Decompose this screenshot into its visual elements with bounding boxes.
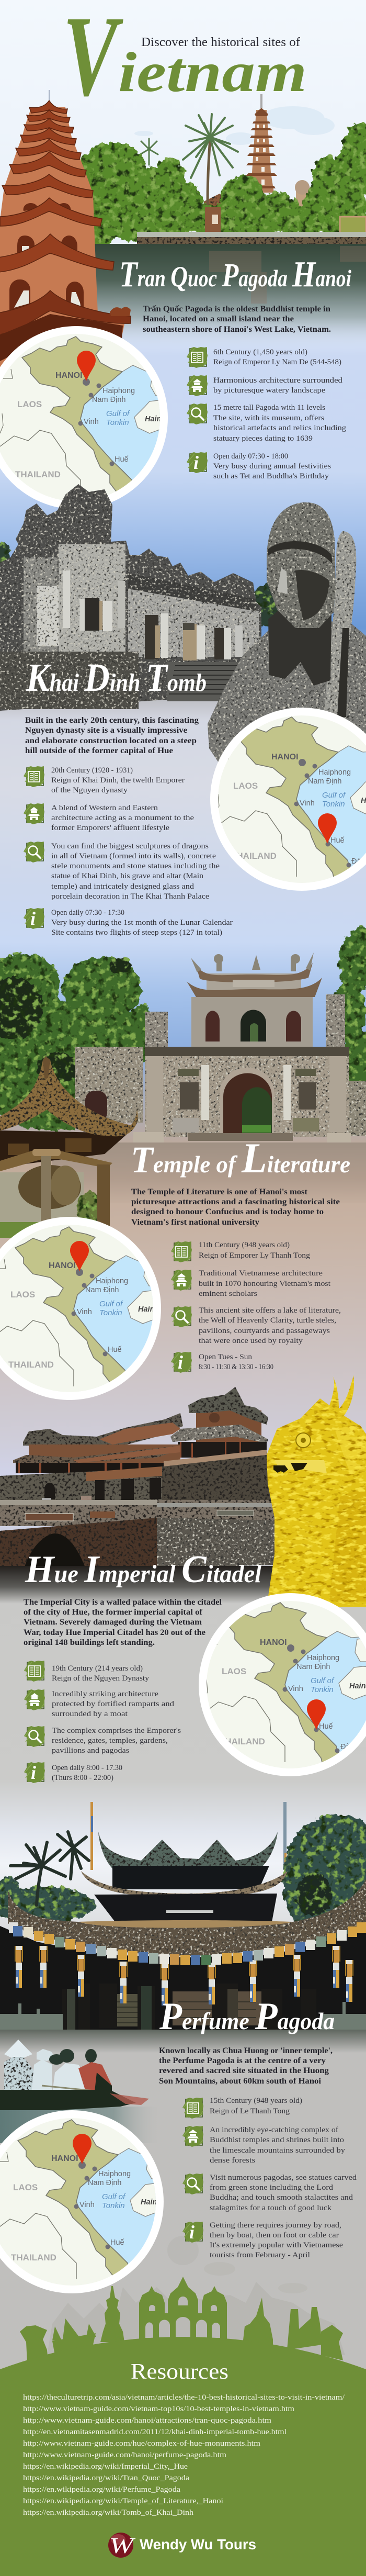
icon: magnifier <box>187 404 208 424</box>
heading: Temple of Literature: Temple of Literature <box>131 1134 350 1182</box>
map: Temple location: Tonkin <box>99 1308 122 1317</box>
sky clouds <box>134 106 335 145</box>
list: resource links: https://en.wikipedia.org/wiki/Tran_Quoc_Pagoda <box>23 2474 189 2482</box>
fact: architecture: Traditional Vietnamese architecture <box>199 1269 323 1278</box>
map: Citadel location: Nam Định <box>296 1663 330 1671</box>
fact: architecture: former Emporers' affluent lifestyle <box>51 824 169 832</box>
tall brick pagoda <box>246 94 277 193</box>
twin towers <box>287 2307 322 2350</box>
long hall roofs <box>13 1413 183 1473</box>
map: Citadel location: THAILAND <box>220 1737 265 1746</box>
fact: features <box>199 1306 341 1345</box>
courtyard ground <box>52 1143 366 1203</box>
fact: opening: Site contains two flights of steep steps (127 in total) <box>51 928 222 937</box>
text: Citadel intro: The Imperial City is a walled palace within the citadel <box>24 1598 222 1607</box>
map: Citadel location: HANOI <box>260 1638 287 1647</box>
church <box>139 2277 227 2342</box>
icon: pagoda <box>24 1689 45 1710</box>
text: Citadel intro <box>24 1598 222 1647</box>
map: Temple location: Haiphong <box>96 1277 128 1285</box>
heading: Hue Imperial Citadel: Hue Imperial Citadel <box>25 1548 262 1591</box>
forest and palms <box>0 1813 366 2025</box>
fact: opening <box>199 1353 273 1371</box>
fact: age: Reign of Emperor Ly Nam De (544-548) <box>213 358 341 366</box>
map: Temple location: Nam Định <box>85 1286 119 1294</box>
icon: book <box>182 2098 203 2119</box>
lake water <box>86 244 366 349</box>
text: Perfume intro: Known locally as Chua Huong or 'inner temple', <box>159 2046 333 2055</box>
fact: features <box>51 842 220 901</box>
stairs <box>167 662 241 701</box>
map: Perfume location: Gulf of <box>102 2192 126 2201</box>
fact: architecture: dense forests <box>210 2156 255 2165</box>
list: resource links <box>23 2393 345 2517</box>
fact: architecture <box>51 804 194 832</box>
temple facade between trees <box>205 207 366 233</box>
fact: architecture: A blend of Western and Eastern <box>51 804 158 812</box>
list: resource links: http://www.vietnam-guide.com/hanoi/attractions/tran-quoc-pagoda.htm <box>23 2416 271 2425</box>
fact: practical <box>210 2221 343 2259</box>
fact: opening: (Thurs 8:00 - 22:00) <box>52 1774 113 1782</box>
panel: Hue Imperial Citadel scene <box>0 1375 366 1607</box>
map: Tran Quoc location <box>0 326 168 508</box>
text: Khai Dinh intro: hill outside of the former capital of Hue <box>25 746 173 755</box>
list: resource links: http://en.vietnamitasenmadrid.com/2011/12/khai-dinh-imperial-tomb-hue.html <box>23 2428 287 2436</box>
trees <box>0 926 366 1130</box>
hanging banners <box>15 1946 353 2006</box>
text: Tran Quoc intro: Trấn Quốc Pagoda is the oldest Buddhist temple in <box>143 305 330 313</box>
logo: Wendy Wu Tours <box>108 2533 256 2558</box>
fact: age: Reign of Khai Dinh, the twelth Emporer <box>51 776 185 785</box>
map: Citadel location: Vinh <box>288 1685 303 1693</box>
skyline silhouette background <box>47 2236 345 2355</box>
tall pagoda <box>100 2286 124 2342</box>
fact: architecture: built in 1070 honouring Vietnam's most <box>199 1280 331 1288</box>
panel: Tran Quoc Pagoda scene <box>0 90 366 377</box>
prayer flags row <box>9 1922 366 1965</box>
bell pavilion <box>0 1056 138 1238</box>
trees behind tomb <box>0 543 281 626</box>
text: Perfume intro: the Perfume Pagoda is at the centre of a very <box>159 2056 326 2065</box>
icon: book <box>187 347 208 368</box>
map: Perfume location: Haiphong <box>98 2170 131 2178</box>
text: Tran Quoc intro: Hanoi, located on a small island near the <box>143 315 294 323</box>
map: Citadel location: LAOS <box>222 1666 246 1676</box>
fact: age <box>199 1241 311 1260</box>
fact: opening: Open daily 07:30 - 17:30 <box>51 909 124 917</box>
icons and facts: Tran Quoc <box>187 347 347 480</box>
fact: architecture: architecture acting as a monument to the <box>51 814 194 822</box>
fact: features: in all of Vietnam (formed into its walls), concrete <box>51 852 216 860</box>
list: resource links: https://en.wikipedia.org/wiki/Perfume_Pagoda <box>23 2485 180 2494</box>
text: Citadel intro: of the city of Hue, the former imperial capital of <box>24 1608 203 1617</box>
junk ship <box>52 2319 96 2355</box>
fact: age: 20th Century (1920 - 1931) <box>51 766 133 775</box>
map: Perfume location: LAOS <box>13 2182 38 2192</box>
map: Khai Dinh location: Gulf of <box>322 791 346 800</box>
map: Tran Quoc location: Gulf of <box>106 409 130 418</box>
fact: opening: Open Tues - Sun <box>199 1353 253 1361</box>
fact: architecture: Harmonious architecture surrounded <box>213 376 343 385</box>
map: Tran Quoc location: Huế <box>115 455 129 464</box>
map: Tran Quoc location: LAOS <box>17 399 42 409</box>
map: Tran Quoc location: Haiphong <box>102 387 135 395</box>
statue <box>208 502 366 764</box>
map: Khai Dinh location: Huế <box>330 836 345 845</box>
right gate <box>321 2325 343 2360</box>
map: Khai Dinh location: Tonkin <box>322 800 345 809</box>
moat water <box>0 1566 277 1604</box>
text: Tran Quoc intro: southeastern shore of Hanoi's West Lake, Vietnam. <box>143 325 331 334</box>
fact: architecture: the limescale mountains surrounded by <box>210 2146 346 2155</box>
icon: pagoda <box>24 803 44 824</box>
icon: info: i <box>189 2222 195 2243</box>
fact: features: Buddha; and touch smooth stalactites and <box>210 2193 353 2202</box>
icon: book <box>24 1661 45 1682</box>
text: Khai Dinh intro: Built in the early 20th century, this fascinating <box>25 716 199 725</box>
map: Khai Dinh location: Haiphong <box>318 768 351 777</box>
map: Citadel location: Gulf of <box>311 1676 335 1685</box>
fact: age: 11th Century (948 years old) <box>199 1241 290 1249</box>
fact: features: historical artefacts and relics including <box>213 424 347 432</box>
map: Tran Quoc location: Vinh <box>84 418 99 426</box>
title: Vietnam: ietnam <box>118 41 307 104</box>
map: Tran Quoc location: THAILAND <box>15 469 61 479</box>
icons and facts: Citadel <box>24 1661 181 1783</box>
text: Citadel intro: original 148 buildings left standing. <box>24 1638 155 1647</box>
text: Temple intro <box>131 1188 340 1227</box>
water bottom left <box>0 2107 162 2143</box>
icon: info <box>182 2222 203 2243</box>
icon: info: i <box>193 452 199 473</box>
fact: features: the Well of Heavenly Clarity, turtle steles, <box>199 1316 336 1325</box>
trees <box>73 123 366 246</box>
fact: features <box>52 1727 181 1755</box>
temple gate upper <box>145 953 345 1049</box>
text: Perfume intro: revered and sacred site situated in the Huong <box>159 2066 329 2075</box>
upper pavilion <box>170 1387 268 1458</box>
heading: Khai Dinh Tomb: Khai Dinh Tomb <box>26 656 207 700</box>
map: Temple location <box>0 1217 161 1400</box>
fact: opening: such as Tet and Buddha's Birthday <box>213 472 329 480</box>
citadel wall <box>0 1450 280 1505</box>
map: Tran Quoc location: HANOI <box>55 371 83 380</box>
icon: book <box>24 766 44 787</box>
map: Khai Dinh location: THAILAND <box>231 851 277 861</box>
logo: Wendy Wu Tours: Wendy Wu Tours <box>140 2536 256 2552</box>
map: Temple location: LAOS <box>10 1290 35 1300</box>
fact: features: residence, gates, temples, gardens, <box>52 1737 168 1745</box>
palm trees <box>140 114 238 231</box>
fact: features <box>210 2174 357 2212</box>
fact: features <box>213 404 347 443</box>
fact: architecture: An incredibly eye-catching complex of <box>210 2126 338 2134</box>
pagoda upper tiers <box>81 1832 288 1922</box>
map: Perfume location: THAILAND <box>11 2253 56 2263</box>
prayer flag poles <box>90 1802 287 1874</box>
fact: features: that were once used by royalty <box>199 1337 303 1345</box>
text: Temple intro: picturesque attractions and a fascinating historical site <box>131 1197 340 1206</box>
text: Tran Quoc intro <box>143 305 331 334</box>
map: Perfume location: Hainan <box>141 2198 166 2207</box>
red pagoda foreground <box>0 90 131 377</box>
fact: features: stalagmites for a touch of good luck <box>210 2204 332 2212</box>
pagoda floor <box>0 2030 366 2053</box>
map: Temple location: THAILAND <box>8 1360 54 1370</box>
map: Citadel location: Tonkin <box>311 1685 334 1694</box>
fact: age <box>213 348 341 366</box>
fact: features: from green stone including the Lord <box>210 2183 334 2192</box>
map: Citadel location: Haiphong <box>307 1654 339 1662</box>
fact: practical: tourists from February - April <box>210 2251 310 2259</box>
map: Perfume location: Nam Định <box>88 2179 121 2187</box>
icon: pagoda <box>187 375 208 396</box>
fact: opening: Very busy during the 1st month of the Lunar Calendar <box>51 919 233 927</box>
text: Khai Dinh intro: and elaborate construction located on a steep <box>25 736 197 745</box>
fact: age: of the Nguyen dynasty <box>51 786 128 794</box>
map: Temple location: Huế <box>108 1346 122 1354</box>
list: resource links: http://www.vietnam-guide.com/hue/complex-of-hue-monuments.htm <box>23 2439 260 2448</box>
tomb facade <box>0 544 259 709</box>
fact: features: porcelain decoration in The Khai Thanh Palace <box>51 892 209 901</box>
list: resource links: https://en.wikipedia.org/wiki/Imperial_City,_Hue <box>23 2462 188 2471</box>
text: Temple intro: designed to honour Confucius and is today home to <box>131 1207 324 1216</box>
map: Citadel location <box>199 1593 366 1788</box>
fact: features: 15 metre tall Pagoda with 11 levels <box>213 404 325 412</box>
illustration: Vietnam landmarks skyline <box>0 2277 366 2576</box>
fact: age: Reign of the Nguyen Dynasty <box>52 1674 150 1683</box>
heading: Resources: Resources <box>131 2360 228 2384</box>
fact: features: This ancient site offers a lake of literature, <box>199 1306 341 1315</box>
fact: architecture <box>210 2126 346 2165</box>
fact: age: Reign of Emporer Ly Thanh Tong <box>199 1251 311 1260</box>
fact: practical: Getting there requires journey by road, <box>210 2221 341 2230</box>
map: Citadel location: Huế <box>319 1722 333 1731</box>
stairs and courtyard <box>62 1984 316 2031</box>
fact: architecture: eminent scholars <box>199 1290 257 1298</box>
icon: magnifier <box>24 842 44 863</box>
icon: magnifier <box>171 1306 192 1327</box>
icon: pagoda <box>182 2126 203 2147</box>
panel: Temple of Literature scene <box>0 926 366 1238</box>
fact: features: Visit numerous pagodas, see statues carved <box>210 2174 357 2182</box>
golden dragon <box>267 1375 366 1607</box>
panel: Perfume Pagoda scene <box>0 1802 366 2143</box>
fact: architecture: Incredibly striking architecture <box>52 1690 158 1698</box>
text: Temple intro: The Temple of Literature is one of Hanoi's most <box>131 1188 308 1196</box>
fact: architecture: Buddhist temples and shrines built into <box>210 2136 344 2144</box>
ground <box>0 691 230 721</box>
roof ridge <box>78 1920 293 1928</box>
lake wall <box>137 232 366 244</box>
pagoda interior <box>0 1926 366 2031</box>
stone bridge <box>0 1500 282 1573</box>
text: Perfume intro <box>159 2046 333 2086</box>
main roof <box>8 1879 366 1956</box>
text: Khai Dinh intro <box>25 716 199 755</box>
list: resource links: http://www.vietnam-guide.com/hanoi/perfume-pagoda.htm <box>23 2451 226 2459</box>
hill <box>0 2337 366 2576</box>
fact: age <box>52 1664 150 1683</box>
fact: opening: Very busy during annual festivities <box>213 462 331 471</box>
map: Temple location: HANOI <box>49 1261 76 1270</box>
map: Tran Quoc location: Tonkin <box>106 418 129 427</box>
map: Khai Dinh location: Vinh <box>300 799 315 808</box>
icon: book <box>171 1241 192 1262</box>
fact: opening <box>51 909 233 937</box>
fact: features: pavilions, courtyards and passageways <box>199 1327 330 1335</box>
map: Tran Quoc location: Hainan <box>145 415 170 423</box>
list: resource links: https://theculturetrip.com/asia/vietnam/articles/the-10-best-historical-sites-to-visit-in-vietnam/ <box>23 2393 345 2402</box>
fact: opening: Open daily 07:30 - 18:00 <box>213 452 288 461</box>
map: Temple location: Gulf of <box>99 1300 123 1308</box>
fact: age: 15th Century (948 years old) <box>210 2097 302 2105</box>
icon: pagoda <box>171 1270 192 1291</box>
map: Temple location: Vinh <box>77 1308 92 1316</box>
fact: architecture <box>52 1690 175 1718</box>
map: Temple location: Hainan <box>138 1305 163 1314</box>
fact: age: 19th Century (214 years old) <box>52 1664 143 1673</box>
fact: opening <box>52 1764 122 1782</box>
lake reflections <box>209 246 366 304</box>
icon: magnifier <box>182 2174 203 2194</box>
title: Discover the historical sites of: Discover the historical sites of <box>141 36 300 49</box>
fact: practical: then by boat, then on foot or cable car <box>210 2231 339 2239</box>
heading: Perfume Pagoda: Perfume Pagoda <box>159 1995 335 2038</box>
list: resource links: https://en.wikipedia.org/wiki/Tomb_of_Khai_Dinh <box>23 2508 194 2517</box>
text: Khai Dinh intro: Nguyen dynasty site is a visually impressive <box>25 726 187 735</box>
fact: architecture <box>199 1269 331 1298</box>
fact: age: 6th Century (1,450 years old) <box>213 348 307 356</box>
fact: opening <box>213 452 331 480</box>
icons and facts: Khai Dinh <box>24 766 233 937</box>
text: Citadel intro: War, today Hue Imperial Citadel has 20 out of the <box>24 1628 205 1637</box>
icons and facts: Perfume <box>182 2097 357 2259</box>
icon: info <box>171 1352 192 1373</box>
map: Perfume location: Tonkin <box>102 2201 125 2210</box>
map: Perfume location: Huế <box>110 2238 124 2247</box>
map: Khai Dinh location <box>210 708 366 903</box>
fact: opening: Open daily 8:00 - 17.30 <box>52 1764 122 1772</box>
left gate <box>20 2325 48 2363</box>
fact: features: The site, with its museum, offers <box>213 414 324 422</box>
fact: features: statuary pieces dating to 1639 <box>213 434 313 443</box>
fact: features: pavillions and pagodas <box>52 1746 129 1755</box>
tourists in boat <box>0 2040 149 2110</box>
map: Perfume location <box>0 2110 164 2293</box>
icon: info: i <box>30 908 36 929</box>
fact: features: The complex comprises the Emporer's <box>52 1727 181 1735</box>
distant temple buildings <box>204 180 366 235</box>
dragon face details <box>273 1433 327 1473</box>
icons and facts: Temple <box>171 1241 341 1373</box>
tomb silhouette <box>0 484 261 711</box>
logo: Wendy Wu Tours: W <box>109 2534 136 2558</box>
text: Citadel intro: Vietnam. Severely damaged during the Vietnam <box>24 1618 202 1627</box>
fact: features: You can find the biggest sculptures of dragons <box>51 842 209 850</box>
map: Perfume location: Vinh <box>79 2201 95 2209</box>
dark tree core <box>0 958 132 1083</box>
icon: info: i <box>31 1762 36 1783</box>
fact: age: Reign of Le Thanh Tong <box>210 2107 290 2115</box>
icon: magnifier <box>24 1726 45 1747</box>
map: Khai Dinh location: LAOS <box>233 781 258 791</box>
map: Tran Quoc location: Nam Định <box>92 396 125 404</box>
icon: info <box>187 452 208 473</box>
fact: architecture: by picturesque watery landscape <box>213 386 325 395</box>
fact: age <box>210 2097 302 2115</box>
fact: architecture: surrounded by a moat <box>52 1710 128 1718</box>
icon: info: i <box>178 1352 183 1373</box>
map: Perfume location: HANOI <box>51 2154 78 2163</box>
fact: architecture: protected by fortified ramparts and <box>52 1700 175 1708</box>
list: resource links: https://en.wikipedia.org/wiki/Temple_of_Literature,_Hanoi <box>23 2497 223 2505</box>
fact: opening: 8:30 - 11:30 & 13:30 - 16:30 <box>199 1363 273 1371</box>
fact: architecture <box>213 376 343 395</box>
temple gate lower <box>75 1047 366 1147</box>
icon: info <box>24 1762 45 1783</box>
railings <box>0 2002 366 2032</box>
fact: features: temple) and intricately designed glass and <box>51 882 195 891</box>
fact: age <box>51 766 185 794</box>
fact: practical: It's extremely popular with Vietnamese <box>210 2241 343 2249</box>
fact: features: statue of Khai Dinh, his grave and altar (Main <box>51 872 204 880</box>
list: resource links: http://www.vietnam-guide.com/vietnam-top10s/10-best-temples-in-vietnam.htm <box>23 2405 294 2413</box>
text: Temple intro: Vietnam's first national university <box>131 1218 259 1227</box>
map: Khai Dinh location: Nam Định <box>308 777 341 786</box>
panel: Khai Dinh Tomb scene <box>0 484 366 764</box>
fact: features: stele monuments and stone statues including the <box>51 862 220 870</box>
gothic temple <box>243 2298 273 2345</box>
map: Khai Dinh location: HANOI <box>271 753 299 761</box>
heading: Tran Quoc Pagoda Hanoi: Tran Quoc Pagoda Hanoi <box>119 254 351 295</box>
icon: info <box>24 908 44 929</box>
text: Perfume intro: Son Mountains, about 60km south of Hanoi <box>159 2077 322 2086</box>
